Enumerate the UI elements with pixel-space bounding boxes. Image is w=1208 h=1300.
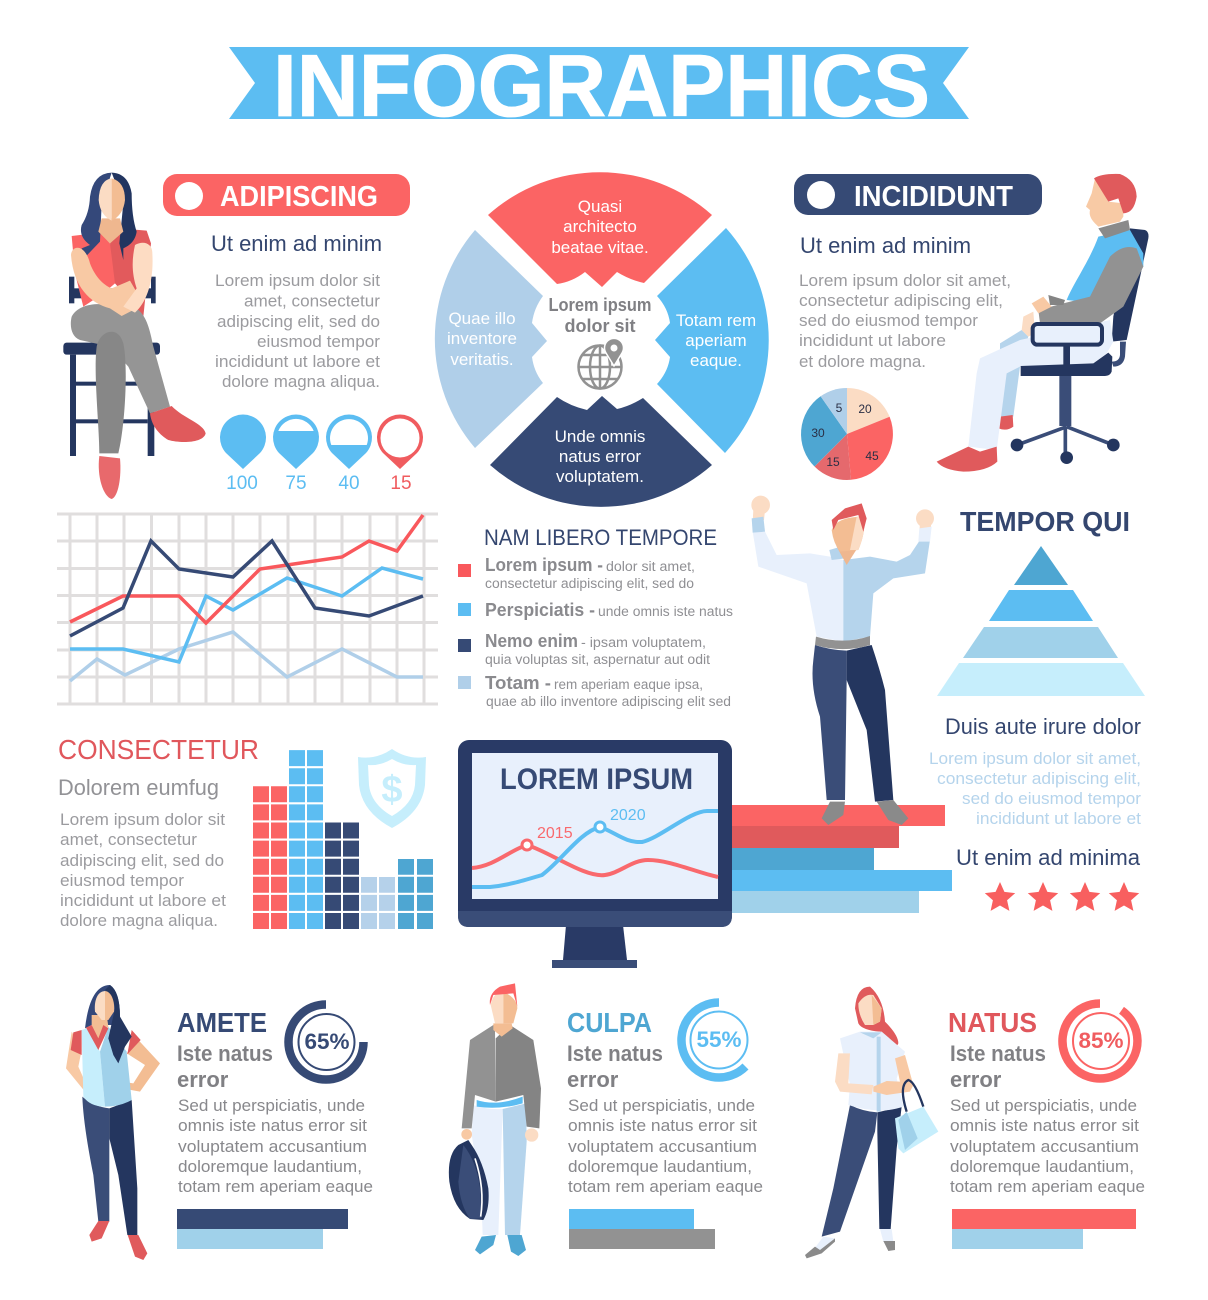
body text: [568, 1096, 763, 1196]
rating label: Ut enim ad minima: [956, 845, 1141, 870]
heading pill: incididunt: [794, 174, 1042, 215]
heading pill: adipiscing: ADIPISCING: [220, 181, 378, 213]
segment: top: beatae vitae.: [551, 238, 649, 257]
body text: [215, 271, 380, 391]
panel: amete: [177, 1004, 373, 1249]
body text: doloremque laudantium,: [950, 1157, 1134, 1176]
figure: man seated on office chair: [937, 174, 1149, 472]
body text: doloremque laudantium,: [568, 1157, 752, 1176]
body text: dolore magna aliqua.: [60, 911, 218, 930]
legend item: lorem ipsum: [458, 555, 695, 591]
body text: Sed ut perspiciatis, unde: [950, 1096, 1137, 1115]
panel: natus: [948, 1004, 1145, 1249]
title banner: INFOGRAPHICS: [273, 37, 930, 135]
body text: omnis iste natus error sit: [950, 1116, 1139, 1135]
legend item: totam: rem aperiam eaque ipsa,: [554, 677, 703, 692]
figure: seated woman on chair: [63, 173, 206, 499]
subheading: Ut enim ad minim: [211, 231, 382, 256]
legend item: nemo enim: Nemo enim: [485, 631, 578, 651]
pie chart: [801, 388, 893, 480]
subheading: [177, 1041, 273, 1092]
segment: right: Totam rem: [676, 311, 756, 330]
panel: tempor qui: [929, 506, 1145, 911]
pin gauges: 75: [285, 473, 307, 494]
body text: sed do eiusmod tempor: [799, 311, 978, 330]
heading pill: incididunt: INCIDIDUNT: [854, 181, 1013, 213]
legend item: perspiciatis: [458, 600, 733, 620]
center label: dolor sit: [564, 316, 636, 336]
body text: omnis iste natus error sit: [568, 1116, 757, 1135]
subheading: Iste natus: [950, 1041, 1046, 1066]
series: navy: [70, 541, 423, 636]
segment: bottom: Unde omnis: [555, 427, 645, 446]
body text: et dolore magna.: [799, 352, 926, 371]
body text: consectetur adipiscing elit,: [937, 769, 1141, 788]
subheading: Iste natus: [177, 1041, 273, 1066]
segment: left: veritatis.: [450, 350, 514, 369]
gauge 85%: [1062, 1004, 1137, 1078]
monitor frame: [458, 740, 732, 927]
segment: right: eaque.: [690, 351, 742, 370]
body text: totam rem aperiam eaque: [568, 1177, 763, 1196]
body text: voluptatem accusantium: [178, 1137, 367, 1156]
legend item: totam: quae ab illo inventore adipiscing elit sed: [486, 694, 731, 709]
body text: amet, consectetur: [244, 292, 380, 310]
segment: right: [655, 228, 769, 453]
figure: standing woman, red hair, with bag: [805, 987, 938, 1258]
gauge 55%: 55%: [696, 1027, 742, 1052]
pin gauges: 40: [338, 473, 360, 494]
body text: totam rem aperiam eaque: [950, 1177, 1145, 1196]
gauge 65%: [288, 1004, 364, 1080]
body text: amet, consectetur: [60, 830, 197, 849]
body text: [60, 810, 226, 930]
body text: [178, 1096, 373, 1196]
segment: top: [488, 172, 712, 287]
center label: [548, 295, 652, 336]
legend item: lorem ipsum: consectetur adipiscing elit, sed do: [485, 576, 694, 591]
series: red: [70, 515, 423, 623]
segment: bottom: voluptatem.: [556, 467, 644, 486]
legend item: nemo enim: [458, 631, 710, 667]
center circular diagram: [435, 172, 769, 507]
monitor stand: [563, 925, 627, 960]
body text: incididunt ut labore: [799, 331, 946, 350]
body text: incididunt ut labore et: [976, 809, 1141, 828]
body text: Lorem ipsum dolor sit amet,: [929, 749, 1141, 768]
body text: Sed ut perspiciatis, unde: [178, 1096, 365, 1115]
panel: culpa: [567, 1002, 763, 1249]
pin gauges: 15: [390, 473, 412, 494]
subheading: error: [567, 1067, 619, 1092]
series: blue: [70, 568, 423, 662]
body text: doloremque laudantium,: [178, 1157, 362, 1176]
figure: cheering man: [751, 496, 934, 825]
pie chart: 15: [826, 455, 840, 469]
comparison bars: [952, 1209, 1136, 1249]
legend item: totam: Totam -: [485, 673, 551, 693]
pin gauges: [220, 415, 423, 494]
gauge 55%: [681, 1002, 748, 1077]
legend panel: [458, 525, 733, 709]
subheading: [950, 1041, 1046, 1092]
pie chart: 20: [858, 402, 872, 416]
comparison bars: [569, 1209, 715, 1249]
body text: Lorem ipsum dolor sit: [215, 271, 380, 290]
icon: globe with pin: [578, 338, 624, 388]
body text: Sed ut perspiciatis, unde: [568, 1096, 755, 1115]
body text: Lorem ipsum dolor sit: [60, 810, 225, 829]
screen heading: LOREM IPSUM: [500, 763, 693, 796]
gauge 65%: 65%: [304, 1029, 350, 1054]
screen line chart: [472, 811, 718, 887]
line chart: [57, 514, 438, 704]
figure: standing woman, dark hair: [66, 985, 160, 1260]
heading pill: adipiscing: [163, 174, 410, 216]
monitor: [458, 740, 732, 968]
pie chart: 45: [865, 449, 879, 463]
body text: [950, 1096, 1145, 1196]
legend item: perspiciatis: unde omnis iste natus: [598, 604, 733, 619]
body text: adipiscing elit, sed do: [60, 851, 224, 870]
pie chart: 5: [836, 401, 843, 415]
body text: [799, 271, 1011, 371]
legend item: totam: [458, 673, 731, 709]
body text: Lorem ipsum dolor sit amet,: [799, 271, 1011, 290]
year labels: 2015: [537, 825, 573, 842]
subheading: Dolorem eumfug: [58, 775, 219, 800]
segment: right: aperiam: [685, 331, 747, 350]
center label: Lorem ipsum: [548, 295, 652, 315]
segment: top: architecto: [563, 217, 637, 236]
body text: incididunt ut labore et: [215, 352, 380, 371]
segment: bottom: [490, 396, 712, 507]
legend heading: NAM LIBERO TEMPORE: [484, 525, 717, 550]
body text: consectetur adipiscing elit,: [799, 291, 1003, 310]
body text: eiusmod tempor: [60, 871, 184, 890]
pyramid chart: [937, 546, 1145, 696]
legend item: lorem ipsum: dolor sit amet,: [606, 559, 695, 574]
stacked step bars: [725, 805, 952, 913]
legend item: nemo enim: - ipsam voluptatem,: [581, 635, 706, 650]
segment: left: inventore: [447, 329, 517, 348]
body text: adipiscing elit, sed do: [217, 312, 380, 331]
series: light blue: [70, 632, 423, 681]
subheading: error: [950, 1067, 1002, 1092]
panel: adipiscing: [163, 174, 423, 494]
icon: dollar shield: [358, 749, 426, 828]
subheading: Ut enim ad minim: [800, 233, 971, 258]
body text: incididunt ut labore et: [60, 891, 226, 910]
heading: TEMPOR QUI: [960, 506, 1130, 537]
subheading: Iste natus: [567, 1041, 663, 1066]
comparison bars: [177, 1209, 348, 1249]
pin gauges: 100: [226, 473, 258, 494]
body text: voluptatem accusantium: [950, 1137, 1139, 1156]
heading: CULPA: [567, 1007, 652, 1038]
body text: eiusmod tempor: [257, 332, 380, 351]
gauge 85%: 85%: [1078, 1028, 1124, 1053]
heading: AMETE: [177, 1007, 267, 1038]
body text: [929, 749, 1141, 828]
body text: voluptatem accusantium: [568, 1137, 757, 1156]
body text: dolore magna aliqua.: [222, 372, 380, 391]
heading: NATUS: [948, 1007, 1037, 1038]
body text: sed do eiusmod tempor: [962, 789, 1141, 808]
body text: omnis iste natus error sit: [178, 1116, 367, 1135]
heading: CONSECTETUR: [58, 734, 259, 765]
figure: standing man with backpack: [449, 983, 541, 1256]
legend item: nemo enim: quia voluptas sit, aspernatur aut odit: [485, 652, 710, 667]
segment: left: Quae illo: [448, 309, 516, 328]
monitor: 2020: [610, 807, 646, 824]
legend item: perspiciatis: Perspiciatis -: [485, 600, 595, 620]
legend item: lorem ipsum: Lorem ipsum -: [485, 555, 603, 575]
block bar chart: [261, 750, 425, 929]
icon: dollar shield: $: [381, 769, 403, 811]
segment: top: Quasi: [578, 197, 622, 216]
rating stars: [985, 882, 1139, 911]
pie chart: 30: [811, 426, 825, 440]
body text: totam rem aperiam eaque: [178, 1177, 373, 1196]
panel: consectetur: [58, 734, 259, 930]
subheading: [567, 1041, 663, 1092]
segment: left: [435, 230, 547, 448]
subheading: error: [177, 1067, 229, 1092]
segment: bottom: natus error: [559, 447, 641, 466]
panel: incididunt: [794, 174, 1042, 480]
subheading: Duis aute irure dolor: [945, 714, 1141, 739]
